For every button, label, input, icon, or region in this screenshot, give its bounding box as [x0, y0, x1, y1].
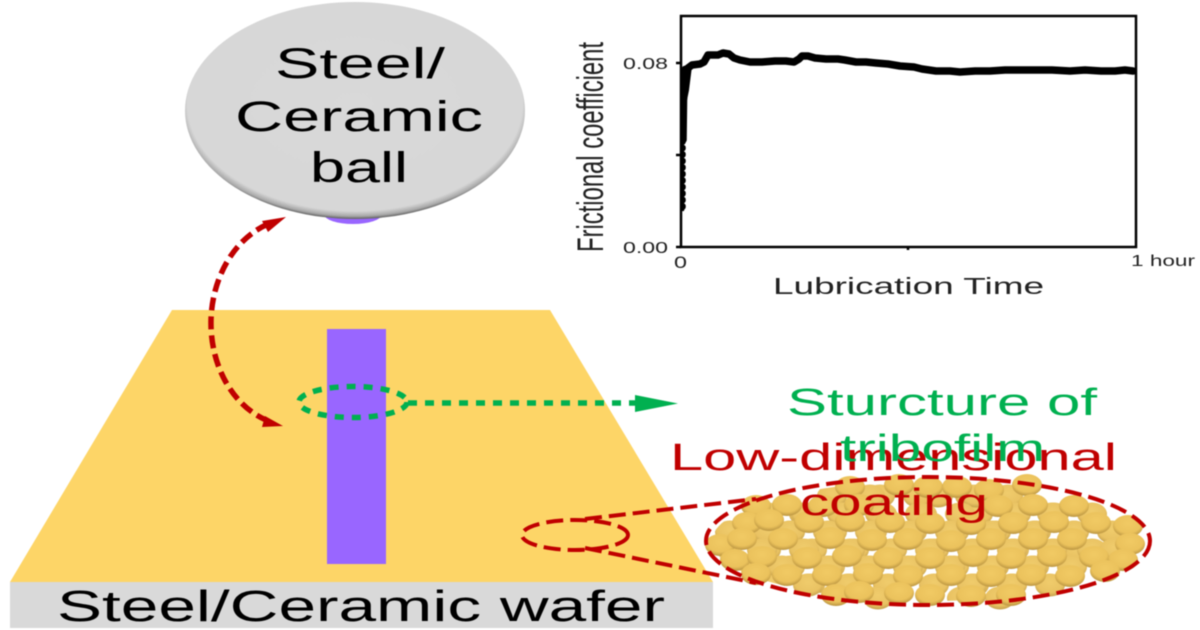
data curve [682, 53, 1133, 210]
ball label: Ceramic [235, 93, 483, 141]
wafer base with label: Steel/Ceramic wafer [57, 582, 665, 630]
green dotted ellipse and arrow [299, 386, 678, 418]
ball label: ball [310, 144, 408, 192]
x axis title: Lubrication Time [773, 273, 1044, 299]
wear track [327, 329, 386, 564]
plot frame and ticks [676, 16, 1136, 250]
y axis labels: 0.00 [623, 240, 668, 257]
label: low-dimensional coating: coating [800, 482, 988, 524]
ball label [235, 40, 483, 192]
wafer surface [10, 310, 713, 582]
arrow: red double-headed curved arrow [211, 217, 286, 427]
line chart: frictional coefficient [570, 16, 1196, 299]
label: structure of tribofilm: tribofilm [840, 428, 1045, 470]
ball label: Steel/ [275, 40, 445, 88]
label: structure of tribofilm [787, 382, 1098, 470]
wafer base with label [10, 582, 713, 630]
x axis tick labels: 0 [674, 253, 687, 272]
label: low-dimensional coating: Low-dimensional [670, 437, 1117, 479]
zoomed tribofilm particles [705, 474, 1145, 610]
x axis tick labels [674, 253, 1196, 272]
label: low-dimensional coating [670, 437, 1117, 524]
red dashed zoom ellipses and connectors [522, 477, 1150, 605]
y axis labels: 0.08 [623, 56, 668, 73]
label: structure of tribofilm: Sturcture of [787, 382, 1098, 424]
y axis labels [623, 56, 668, 257]
x axis tick labels: 1 hour [1131, 253, 1196, 270]
icon: steel/ceramic ball [185, 2, 525, 224]
